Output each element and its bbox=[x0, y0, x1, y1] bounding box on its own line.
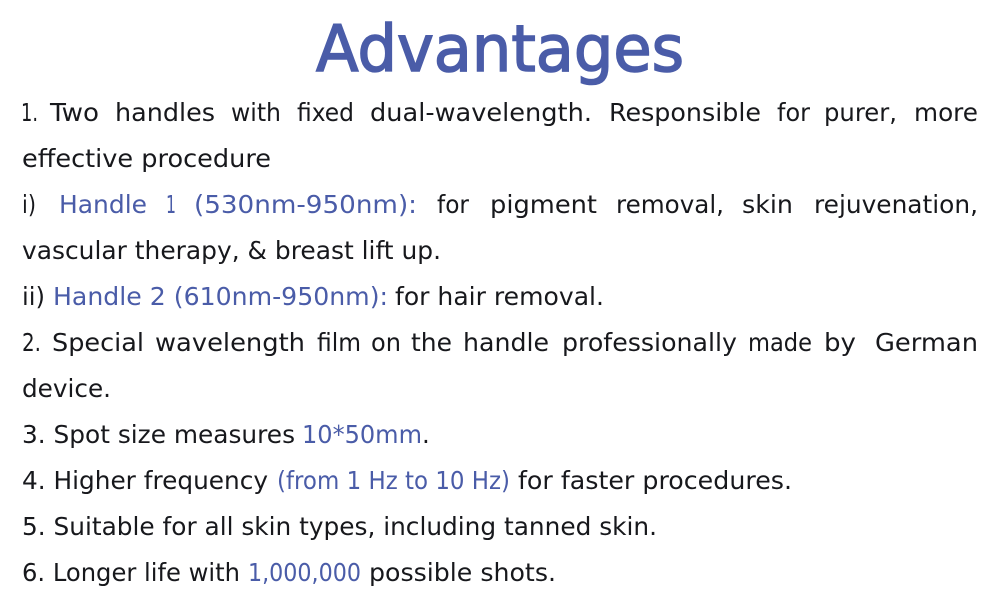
line: item 4: (from 1 Hz to 10 Hz) bbox=[277, 466, 510, 495]
line: item 1: for bbox=[777, 98, 811, 127]
line: handle 1: removal, bbox=[616, 190, 724, 219]
line: item 6: possible shots. bbox=[369, 558, 556, 587]
line: item 1: handles bbox=[115, 98, 215, 127]
line: item 2: made bbox=[748, 328, 812, 357]
line: handle 1: skin bbox=[742, 190, 793, 219]
line: item 4: 4. Higher frequency bbox=[22, 466, 268, 495]
line: item 6 bbox=[22, 558, 556, 587]
line: item 2: wavelength bbox=[155, 328, 305, 357]
line: handle 2 bbox=[22, 282, 604, 311]
line: item 2: handle bbox=[463, 328, 549, 357]
line: item 4 bbox=[22, 466, 792, 495]
line: item 2 bbox=[22, 328, 978, 357]
line: item 2: 2. bbox=[22, 328, 41, 357]
line: item 1: purer, bbox=[824, 98, 897, 127]
line: handle 1 continued: vascular therapy, & breast lift up. bbox=[22, 236, 441, 265]
line: item 3 bbox=[22, 420, 430, 449]
line: item 1: more bbox=[914, 98, 978, 127]
line: item 1 bbox=[21, 98, 978, 127]
line: item 1 continued: effective procedure bbox=[22, 144, 271, 173]
line: item 1: 1. bbox=[21, 98, 38, 127]
line: item 2: by bbox=[824, 328, 856, 357]
line: item 3: 10*50mm bbox=[302, 420, 422, 449]
line: item 1: with bbox=[231, 98, 281, 127]
title: Advantages bbox=[316, 13, 684, 87]
line: item 2 continued: device. bbox=[22, 374, 111, 403]
line: item 3: 3. Spot size measures bbox=[22, 420, 295, 449]
line: item 2: German bbox=[875, 328, 978, 357]
line: item 1: dual-wavelength. bbox=[370, 98, 592, 127]
line: handle 1: (530nm-950nm): bbox=[194, 190, 417, 219]
line: item 1: fixed bbox=[297, 98, 354, 127]
line: item 2: the bbox=[411, 328, 452, 357]
line: item 5: 5. Suitable for all skin types, including tanned skin. bbox=[22, 512, 657, 541]
line: item 2: professionally bbox=[562, 328, 737, 357]
line: item 1: Responsible bbox=[609, 98, 761, 127]
line: handle 1: rejuvenation, bbox=[814, 190, 978, 219]
text block: advantages list bbox=[21, 98, 978, 587]
line: handle 1: 1 bbox=[166, 190, 176, 219]
line: item 4: for faster procedures. bbox=[518, 466, 792, 495]
line: item 6: 1,000,000 bbox=[248, 558, 361, 587]
line: handle 1: i) bbox=[22, 190, 36, 219]
line: item 2: film bbox=[317, 328, 361, 357]
line: handle 2: ii) bbox=[22, 282, 45, 311]
line: handle 1: for bbox=[437, 190, 470, 219]
line: item 6: 6. Longer life with bbox=[22, 558, 240, 587]
line: item 3: . bbox=[422, 420, 430, 449]
line: handle 1: Handle bbox=[59, 190, 147, 219]
line: handle 1: pigment bbox=[490, 190, 597, 219]
line: item 1: Two bbox=[49, 98, 99, 127]
line: item 2: on bbox=[371, 328, 401, 357]
line: item 2: Special bbox=[52, 328, 144, 357]
line: handle 2: for hair removal. bbox=[395, 282, 604, 311]
line: handle 1 bbox=[22, 190, 978, 219]
line: handle 2: Handle 2 (610nm-950nm): bbox=[53, 282, 388, 311]
